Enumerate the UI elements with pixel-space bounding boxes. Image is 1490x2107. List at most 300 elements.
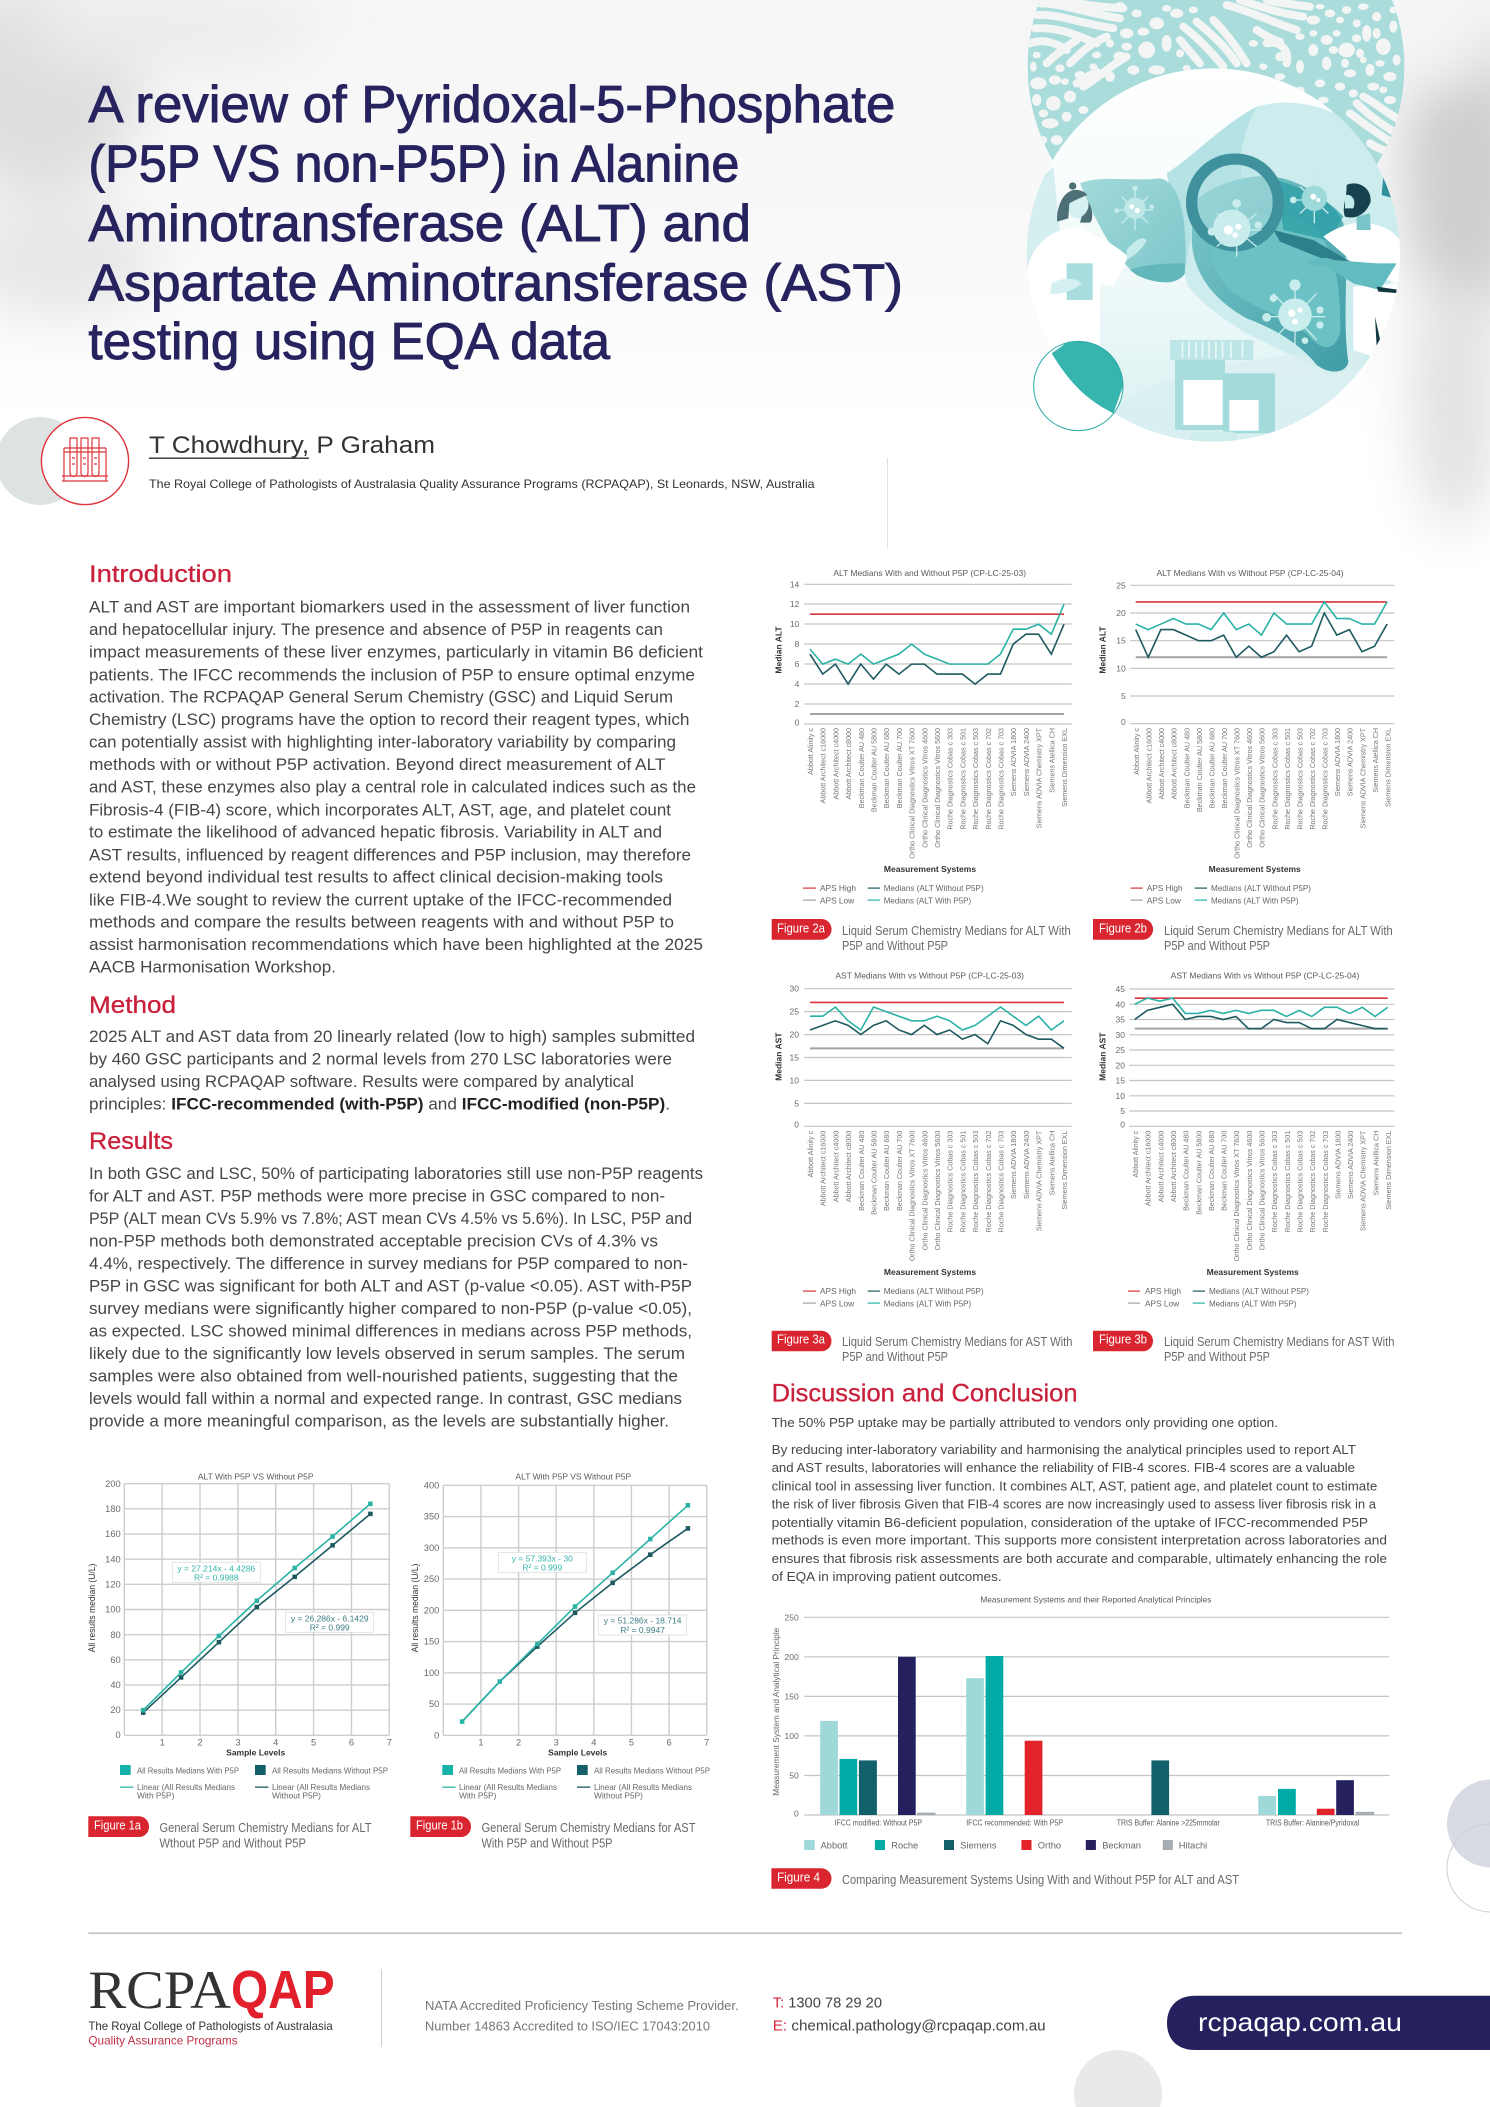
chart: figure 1a scatter: 2 <box>197 1738 203 1748</box>
chart: figure 3a line chart: Roche Diagnostics Cobas c 703 <box>998 1131 1006 1232</box>
chart: figure 3a line chart: APS High <box>820 1286 856 1296</box>
scientist man <box>1305 177 1403 367</box>
text block: method: 2025 ALT and AST data from 20 linearly related (low to high) samples submitted <box>89 1027 695 1046</box>
figure tag 3a <box>772 1331 832 1351</box>
text block: method: analysed using RCPAQAP software. Results were compared by analytical <box>89 1072 634 1091</box>
heading: method: Method <box>89 992 176 1019</box>
text block: results: survey medians were significantly higher compared to non-P5P (p-value <0.05), <box>89 1299 692 1318</box>
chart: figure 4 bar chart: IFCC recommended: With P5P <box>966 1818 1063 1827</box>
chart: figure 2b line chart: Siemens ADVIA 1800 <box>1334 728 1342 796</box>
text block: introduction: to estimate the likelihood of advanced hepatic fibrosis. Variability in ALT and <box>89 823 662 842</box>
chart: figure 2b line chart: Beckman Coulter AU 680 <box>1208 728 1216 808</box>
caption 3b: Liquid Serum Chemistry Medians for AST With <box>1164 1335 1395 1349</box>
panel: introduction <box>89 561 703 977</box>
chart: figure 3b line chart: 5 <box>1120 1106 1125 1116</box>
chart: figure 2b line chart: Beckman Coulter AU 700 <box>1221 728 1229 808</box>
chart: figure 1b scatter: R² = 0.999 <box>522 1562 563 1572</box>
chart: figure 1a scatter: All results median (U/L) <box>87 1564 97 1652</box>
figure tag 1a <box>88 1816 149 1837</box>
chart: figure 2a line chart: Abbott Alinity c <box>807 728 815 775</box>
chart: figure 1a scatter: ALT With P5P VS Without P5P <box>198 1471 314 1481</box>
chart: figure 1a scatter: 100 <box>105 1605 121 1615</box>
text block: introduction: patients. The IFCC recommends the inclusion of P5P to ensure optimal enzyme <box>89 665 695 684</box>
chart: figure 3a line chart: Siemens ADVIA 2400 <box>1023 1131 1031 1199</box>
chart: figure 1b scatter: y = 51.286x - 18.714 <box>604 1616 682 1626</box>
chart: figure 2a line chart: Siemens ADVIA Chemistry XPT <box>1036 727 1044 828</box>
chart: figure 1b scatter: 50 <box>429 1699 439 1709</box>
accreditation text: NATA Accredited Proficiency Testing Scheme Provider. <box>425 1999 739 2013</box>
magnifying glass <box>1192 159 1362 268</box>
caption 1a: Wthout P5P and Without P5P <box>160 1836 306 1850</box>
text block: introduction: AST results, influenced by reagent differences and P5P inclusion, may therefore <box>89 845 691 864</box>
inset circle <box>1033 340 1124 432</box>
chart: figure 1a scatter: 6 <box>349 1738 354 1748</box>
chart: figure 2a line chart: Beckman Coulter AU 480 <box>858 728 866 808</box>
chart: figure 4 bar chart: 200 <box>785 1652 799 1662</box>
logo: RCPAQAP: QAP <box>231 1960 335 2020</box>
chart: figure 2a line chart: 6 <box>795 659 800 669</box>
chart: figure 2b line chart: Siemens ADVIA Chemistry XPT <box>1359 727 1367 828</box>
chart: figure 2a line chart <box>772 568 1072 953</box>
chart: figure 2b line chart: Ortho Clinical Diagnostics Vitros 5600 <box>1259 728 1267 848</box>
text block: results: as expected. LSC showed minimal differences in medians across P5P methods, <box>89 1322 692 1340</box>
chart: figure 3a line chart: 25 <box>790 1007 799 1017</box>
chart: figure 1b scatter: 4 <box>591 1738 596 1748</box>
chart: figure 2a line chart: 10 <box>790 619 800 629</box>
chart: figure 1b scatter: 5 <box>629 1738 634 1748</box>
chart: figure 2b line chart: 10 <box>1116 663 1126 673</box>
bars: roche <box>840 1656 1296 1815</box>
text block: results: P5P (ALT mean CVs 5.9% vs 7.8%; AST mean CVs 4.5% vs 5.6%). In LSC, P5P and <box>89 1209 692 1228</box>
chart: figure 4 bar chart: 150 <box>785 1691 799 1701</box>
chart: figure 3b line chart: Abbott Architect c8000 <box>1170 1131 1178 1202</box>
chart: figure 1a scatter: Without P5P) <box>272 1791 321 1801</box>
chart: figure 2a line chart: Abbott Architect c16000 <box>820 728 828 803</box>
chart: figure 3a line chart: 5 <box>794 1098 799 1108</box>
chart: figure 3a line chart: Beckman Coulter AU 5800 <box>870 1131 878 1215</box>
caption 2b: P5P and Without P5P <box>1164 939 1270 953</box>
chart: figure 3b line chart: Medians (ALT With P5P) <box>1209 1298 1297 1308</box>
affiliation: The Royal College of Pathologists of Australasia Quality Assurance Programs (RCPAQAP), St Leonards, NSW, Australia <box>149 477 815 491</box>
chart: figure 1a scatter: All Results Medians Without P5P <box>272 1765 388 1775</box>
chart: figure 2a line chart: 12 <box>790 599 800 609</box>
chart: figure 1b scatter: 7 <box>704 1738 709 1748</box>
legend: Roche <box>891 1840 918 1850</box>
chart: figure 3b line chart: Ortho Clinical Diagnostics Vitros 5600 <box>1258 1131 1266 1250</box>
chart: figure 1b scatter: Linear (All Results Medians <box>459 1782 557 1792</box>
chart: figure 3a line chart: Roche Diagnostics Cobas c 303 <box>947 1131 955 1232</box>
caption 2b: Liquid Serum Chemistry Medians for ALT With <box>1164 924 1393 938</box>
contact details <box>773 1996 1046 2035</box>
chart: figure 2a line chart: Roche Diagnostics Cobas c 703 <box>998 728 1006 830</box>
chart: figure 2b line chart: Abbott Alinity c <box>1133 728 1141 775</box>
caption 3a: P5P and Without P5P <box>842 1350 948 1364</box>
caption 4: Comparing Measurement Systems Using With and Without P5P for ALT and AST <box>842 1873 1239 1887</box>
chart: figure 2b line chart: Roche Diagnostics Cobas c 703 <box>1322 728 1330 830</box>
chart: figure 3b line chart: Ortho Clinical Diagnostics Vitros XT 7600 <box>1233 1131 1241 1261</box>
text block: results: for ALT and AST. P5P methods were more precise in GSC compared to non- <box>89 1186 665 1206</box>
text block: results: non-P5P methods both demonstrated acceptable precision CVs of 4.3% vs <box>89 1232 658 1250</box>
text block: introduction: and AST, these enzymes also play a central role in calculated indices such as the <box>89 778 696 797</box>
chart: figure 2a line chart: Ortho Clinical Diagnostics Vitros XT 7600 <box>909 728 917 859</box>
text block: introduction: like FIB-4.We sought to review the current uptake of the IFCC-recommended <box>89 890 672 909</box>
chart: figure 1a scatter: 60 <box>110 1655 121 1665</box>
chart: figure 3a line chart <box>772 971 1073 1364</box>
chart: figure 3b line chart: Siemens ADVIA 2400 <box>1347 1131 1355 1199</box>
caption 3b: P5P and Without P5P <box>1164 1350 1270 1364</box>
chart: figure 3a line chart: Beckman Coulter AU 480 <box>858 1131 866 1211</box>
text block: introduction <box>89 598 703 977</box>
figure tag 3b <box>1093 1331 1153 1351</box>
chart: figure 3b line chart <box>1093 971 1395 1364</box>
chart: figure 2a line chart: 2 <box>795 699 800 709</box>
caption 3a: Liquid Serum Chemistry Medians for AST With <box>842 1335 1073 1349</box>
chart: figure 1a scatter: With P5P) <box>137 1791 175 1801</box>
chart: figure 4 bar chart: 100 <box>785 1731 799 1741</box>
title: testing using EQA data <box>88 313 610 371</box>
chart: figure 2b line chart: Medians (ALT Without P5P) <box>1211 883 1311 893</box>
chart: figure 1b scatter: 300 <box>424 1543 439 1553</box>
doctor woman <box>1027 182 1147 350</box>
chart: figure 1a scatter: R² = 0.9988 <box>194 1573 239 1583</box>
legend: Beckman <box>1102 1840 1141 1850</box>
figure tag 2a <box>772 919 832 940</box>
chart: figure 3b line chart: Siemens Atellica CH <box>1372 1131 1380 1195</box>
legend: Ortho <box>1038 1840 1061 1850</box>
chart: figure 4 bar chart: IFCC modified: Without P5P <box>835 1818 922 1827</box>
chart: figure 3b line chart: Abbott Architect c4000 <box>1157 1131 1165 1202</box>
text block: discussion: ensures that fibrosis risk assessments are both accurate and comparable, ultimately enhancing the role <box>772 1551 1387 1566</box>
chart: figure 1a scatter: All Results Medians With P5P <box>137 1765 239 1775</box>
text block: discussion: the risk of liver fibrosis Given that FIB-4 scores are now increasingly used to assess liver fibrosis risk in a <box>772 1497 1377 1512</box>
text block: discussion: The 50% P5P uptake may be partially attributed to vendors only providing one option. <box>772 1415 1278 1430</box>
contact details: E: chemical.pathology@rcpaqap.com.au <box>773 2019 1046 2035</box>
panel: method <box>89 992 695 1114</box>
chart: figure 1b scatter: Linear (All Results Medians <box>594 1782 692 1792</box>
chart: figure 3b line chart: Abbott Architect c16000 <box>1145 1131 1153 1206</box>
chart: figure 3a line chart: Ortho Clinical Diagnostics Vitros 5600 <box>934 1131 942 1250</box>
chart: figure 1a scatter: 7 <box>387 1738 392 1748</box>
chart: figure 2a line chart: 4 <box>795 679 800 689</box>
text block: method <box>89 1027 695 1114</box>
chart: figure 3a line chart: Measurement Systems <box>884 1267 976 1277</box>
chart: figure 3b line chart: Beckman Coulter AU 480 <box>1183 1131 1191 1211</box>
chart: figure 2a line chart: Medians (ALT With P5P) <box>884 896 971 906</box>
chart: figure 2a line chart: APS Low <box>820 896 855 906</box>
chart: figure 3a line chart: Abbott Architect c8000 <box>845 1131 853 1202</box>
chart: figure 3b line chart: Roche Diagnostics Cobas c 303 <box>1271 1131 1279 1232</box>
chart: figure 2b line chart: Siemens Atellica CH <box>1372 728 1380 793</box>
logo: RCPAQAP <box>88 1960 335 2048</box>
sample bottles <box>1170 340 1275 442</box>
chart: figure 1a scatter: 4 <box>273 1738 278 1748</box>
chart: figure 1a scatter: Sample Levels <box>226 1748 286 1758</box>
chart: figure 3b line chart: 40 <box>1116 999 1125 1009</box>
chart: figure 3b line chart: Ortho Clinical Diagnostics Vitros 4600 <box>1246 1131 1254 1250</box>
pattern: cell texture circle <box>1028 0 1404 165</box>
figure tag 4 <box>771 1868 832 1889</box>
chart: figure 3b line chart: 20 <box>1116 1060 1125 1070</box>
chart: figure 1a scatter: 80 <box>110 1630 121 1640</box>
caption 2a: P5P and Without P5P <box>842 939 948 953</box>
chart: figure 3b line chart: 0 <box>1120 1120 1125 1130</box>
chart: figure 2b line chart: Roche Diagnostics Cobas c 503 <box>1296 728 1304 830</box>
chart: figure 3a line chart: Siemens Dimension EXL <box>1061 1131 1069 1210</box>
chart: figure 2b line chart: Roche Diagnostics Cobas c 303 <box>1271 728 1279 830</box>
liver left lobe <box>1080 178 1186 282</box>
text block: method: by 460 GSC participants and 2 normal levels from 270 LSC laboratories were <box>89 1050 672 1068</box>
text block: results: In both GSC and LSC, 50% of participating laboratories still use non-P5P reagents <box>89 1164 703 1183</box>
chart: figure 2b line chart: Abbott Architect c4000 <box>1158 728 1166 799</box>
chart: figure 3b line chart: 45 <box>1116 984 1125 994</box>
chart: figure 1b scatter: 2 <box>516 1738 521 1748</box>
chart: figure 2a line chart: Abbott Architect c4000 <box>832 728 840 799</box>
chart: figure 2a line chart: Abbott Architect c8000 <box>845 728 853 799</box>
chart: figure 3a line chart: Roche Diagnostics Cobas c 503 <box>972 1131 980 1232</box>
text block: introduction: methods with or without P5P activation. Beyond direct measurement of ALT <box>89 755 666 774</box>
text block: introduction: Fibrosis-4 (FIB-4) score, which incorporates ALT, AST, age, and platelet count <box>89 800 671 819</box>
illustration disk <box>1023 67 1403 447</box>
chart: figure 1b scatter: 200 <box>424 1606 439 1616</box>
chart: figure 2a line chart: 0 <box>795 718 800 728</box>
chart: figure 3a line chart: Roche Diagnostics Cobas c 702 <box>985 1131 993 1232</box>
chart: figure 3b line chart: APS High <box>1145 1286 1181 1296</box>
title: A review of Pyridoxal-5-Phosphate <box>88 76 895 134</box>
chart: figure 3a line chart: Siemens ADVIA Chemistry XPT <box>1036 1130 1044 1231</box>
viruses <box>1114 186 1329 344</box>
chart: figure 3a line chart: Siemens ADVIA 1800 <box>1010 1131 1018 1199</box>
caption 1b: With P5P and Without P5P <box>482 1836 612 1850</box>
chart: figure 1a scatter: 40 <box>110 1680 121 1690</box>
heading: discussion and conclusion: Discussion and Conclusion <box>772 1380 1078 1408</box>
caption 3b <box>1164 1335 1395 1364</box>
bars: ortho <box>1025 1741 1334 1815</box>
text block: discussion: potentially vitamin B6-deficient population, consideration of the uptake of IFCC-recommended P5P <box>772 1515 1368 1530</box>
chart: figure 3b line chart: Roche Diagnostics Cobas c 703 <box>1322 1131 1330 1232</box>
panel: results <box>89 1128 703 1430</box>
chart: figure 3b line chart: Siemens Dimension EXL <box>1385 1131 1393 1210</box>
chart: figure 3a line chart: 0 <box>794 1120 799 1130</box>
text block: discussion: By reducing inter-laboratory variability and harmonising the analytical principles used to report ALT <box>772 1442 1356 1457</box>
legend <box>804 1840 1207 1850</box>
caption 2a: Liquid Serum Chemistry Medians for ALT With <box>842 924 1071 938</box>
chart: figure 2b line chart: Ortho Clinical Diagnostics Vitros XT 7600 <box>1234 728 1242 859</box>
chart: figure 3b line chart: Beckman Coulter AU 680 <box>1208 1131 1216 1211</box>
title <box>88 76 903 371</box>
chart: figure 3b line chart: Roche Diagnostics Cobas c 702 <box>1309 1131 1317 1232</box>
chart: figure 2a line chart: Siemens ADVIA 2400 <box>1023 728 1031 796</box>
chart: figure 1a scatter: 5 <box>311 1738 316 1748</box>
chart: figure 4 bar chart: TRIS Buffer: Alanine >225mmolar <box>1117 1818 1220 1827</box>
caption 2a <box>842 924 1071 953</box>
chart: figure 1b scatter: 1 <box>478 1738 483 1748</box>
chart: figure 3b line chart: Median AST <box>1098 1032 1108 1081</box>
chart: figure 1a scatter: 0 <box>116 1730 121 1740</box>
chart: figure 3a line chart: Median AST <box>774 1032 784 1081</box>
chart: figure 2b line chart: APS High <box>1147 883 1183 893</box>
text block: introduction: methods and compare the results between reagents with and without P5P to <box>89 913 674 932</box>
chart: figure 3b line chart: Siemens ADVIA 1800 <box>1334 1131 1342 1199</box>
chart: figure 2b line chart: ALT Medians With vs Without P5P (CP-LC-25-04) <box>1156 568 1344 578</box>
text block: discussion: methods is even more important. This supports more consistent interpretation across laboratories and <box>772 1533 1387 1548</box>
heading: introduction: Introduction <box>89 561 232 588</box>
chart: figure 2b line chart: Beckman Coulter AU 480 <box>1183 728 1191 808</box>
text block: results: P5P in GSC was significant for both ALT and AST (p-value <0.05). AST with-P5P <box>89 1276 692 1296</box>
text block: introduction: extend beyond individual test results to affect clinical decision-making tools <box>89 868 663 887</box>
liver right lobe <box>1192 176 1348 372</box>
text block: introduction: Chemistry (LSC) programs have the option to record their reagent types, which <box>89 710 690 729</box>
chart: figure 1b scatter: With P5P) <box>459 1791 497 1801</box>
chart: figure 4 bar chart: Measurement Systems and their Reported Analytical Principles <box>980 1595 1211 1605</box>
logo: RCPAQAP: Quality Assurance Programs <box>88 2034 238 2048</box>
caption 1b <box>482 1821 696 1850</box>
chart: figure 2b line chart <box>1093 568 1394 953</box>
chart: figure 2a line chart: Beckman Coulter AU 5800 <box>870 728 878 812</box>
chart: figure 2b line chart: Median ALT <box>1098 626 1108 674</box>
chart: figure 1b scatter: All results median (U/L) <box>410 1564 420 1652</box>
text block: introduction: and hepatocellular injury. The presence and absence of P5P in reagents can <box>89 620 663 639</box>
chart: figure 2a line chart: APS High <box>820 883 856 893</box>
chart: figure 1b scatter: Without P5P) <box>594 1791 643 1801</box>
chart: figure 2b line chart: 25 <box>1116 580 1126 590</box>
chart: figure 3a line chart: Siemens Atellica CH <box>1048 1131 1056 1195</box>
chart: figure 1a scatter: 120 <box>105 1580 121 1590</box>
chart: figure 3a line chart: 10 <box>790 1075 799 1085</box>
chart: figure 1b scatter: 400 <box>424 1480 439 1490</box>
chart: figure 1b scatter: 100 <box>424 1668 439 1678</box>
chart: figure 3a line chart: Medians (ALT With P5P) <box>884 1298 971 1308</box>
website pill: rcpaqap.com.au <box>1198 2007 1402 2037</box>
legend: Abbott <box>821 1840 848 1850</box>
chart: figure 1b scatter: Sample Levels <box>548 1748 608 1758</box>
chart: figure 3b line chart: AST Medians With vs Without P5P (CP-LC-25-04) <box>1171 971 1359 981</box>
figure tag 3b: Figure 3b <box>1099 1331 1147 1346</box>
chart: figure 2a line chart: Roche Diagnostics Cobas c 702 <box>985 728 993 830</box>
bars: abbott <box>820 1678 1276 1815</box>
text block: introduction: ALT and AST are important biomarkers used in the assessment of liver function <box>89 598 690 617</box>
bars: beckman <box>898 1657 1354 1815</box>
heading: results: Results <box>89 1128 173 1155</box>
panel: discussion and conclusion <box>772 1380 1387 1584</box>
chart: figure 3a line chart: Beckman Coulter AU 680 <box>883 1131 891 1211</box>
chart: figure 3b line chart: Abbott Alinity c <box>1132 1130 1140 1178</box>
chart: figure 3b line chart: 15 <box>1116 1076 1125 1086</box>
chart: figure 2b line chart: Siemens ADVIA 2400 <box>1347 728 1355 796</box>
caption 1a: General Serum Chemistry Medians for ALT <box>160 1821 372 1835</box>
chart: figure 2a line chart: Roche Diagnostics Cobas c 503 <box>972 728 980 830</box>
chart: figure 2a line chart: ALT Medians With and Without P5P (CP-LC-25-03) <box>833 568 1026 578</box>
accreditation text <box>425 1999 739 2034</box>
figure tag 2b <box>1093 919 1153 940</box>
chart: figure 2a line chart: Beckman Coulter AU 700 <box>896 728 904 808</box>
legend: Siemens <box>960 1840 997 1850</box>
figure tag 4: Figure 4 <box>777 1870 820 1885</box>
chart: figure 4 bar chart <box>771 1595 1389 1889</box>
chart: figure 2a line chart: 14 <box>790 579 800 589</box>
text block: results: provide a more meaningful comparison, as the levels are substantially higher. <box>89 1412 669 1430</box>
accreditation text: Number 14863 Accredited to ISO/IEC 17043:2010 <box>425 2020 710 2034</box>
chart: figure 2b line chart: 5 <box>1121 691 1126 701</box>
chart: figure 1b scatter: 0 <box>434 1730 439 1740</box>
chart: figure 1a scatter: Linear (All Results Medians <box>137 1782 235 1792</box>
chart: figure 2b line chart: Medians (ALT With P5P) <box>1211 896 1299 906</box>
chart: figure 1a scatter: 3 <box>235 1738 240 1748</box>
chart: figure 1a scatter: 1 <box>160 1738 165 1748</box>
chart: figure 1a scatter: 160 <box>105 1529 121 1539</box>
chart: figure 3b line chart: Siemens ADVIA Chemistry XPT <box>1360 1130 1368 1231</box>
text block: method: principles: IFCC-recommended (with-P5P) and IFCC-modified (non-P5P). <box>89 1094 670 1114</box>
chart: figure 1a scatter: 140 <box>105 1554 121 1564</box>
figure tag 3a: Figure 3a <box>777 1331 826 1346</box>
icon: test tubes badge <box>0 417 129 505</box>
chart: figure 4 bar chart: Measurement System and Analytical Principle <box>771 1627 781 1796</box>
figure tag 2a: Figure 2a <box>777 921 826 936</box>
chart: figure 2a line chart: Beckman Coulter AU 680 <box>883 728 891 808</box>
chart: figure 3b line chart: Roche Diagnostics Cobas c 503 <box>1296 1131 1304 1232</box>
chart: figure 3a line chart: APS Low <box>820 1298 855 1308</box>
bars: siemens <box>859 1760 1169 1815</box>
chart: figure 1b scatter <box>410 1471 710 1850</box>
caption 1a <box>160 1821 372 1850</box>
chart: figure 3a line chart: 30 <box>790 984 799 994</box>
chart: figure 2b line chart: 20 <box>1116 608 1126 618</box>
chart: figure 2a line chart: Roche Diagnostics Cobas c 501 <box>959 728 967 830</box>
website pill <box>1167 1996 1490 2050</box>
text block: discussion <box>772 1415 1387 1584</box>
chart: figure 1b scatter: 6 <box>667 1738 672 1748</box>
chart: figure 2a line chart: Siemens Dimension EXL <box>1061 728 1069 807</box>
chart: figure 3b line chart: 30 <box>1116 1030 1125 1040</box>
chart: figure 1b scatter: 350 <box>424 1512 439 1522</box>
chart: figure 3a line chart: Ortho Clinical Diagnostics Vitros 4600 <box>921 1131 929 1250</box>
chart: figure 1b scatter: 150 <box>424 1637 439 1647</box>
chart: figure 2a line chart: Siemens Atellica CH <box>1048 728 1056 793</box>
chart: figure 1b scatter: 250 <box>424 1574 439 1584</box>
chart: figure 1a scatter: R² = 0.999 <box>310 1623 350 1633</box>
chart: figure 1b scatter: R² = 0.9947 <box>620 1625 665 1635</box>
chart: figure 2b line chart: Roche Diagnostics Cobas c 501 <box>1284 728 1292 830</box>
logo: RCPAQAP: The Royal College of Pathologists of Australasia <box>88 2019 333 2033</box>
figure tag 1a: Figure 1a <box>94 1817 142 1832</box>
figure tag 1b <box>410 1816 471 1837</box>
chart: figure 3a line chart: 15 <box>790 1052 799 1062</box>
chart: figure 1a scatter: Linear (All Results Medians <box>272 1782 370 1792</box>
chart: figure 1b scatter: All Results Medians With P5P <box>459 1765 561 1775</box>
text block: results <box>89 1164 703 1430</box>
chart: figure 2a line chart: 8 <box>795 639 800 649</box>
text block: introduction: assist harmonisation recommendations which have been highlighted at the 2025 <box>89 935 703 954</box>
illustration: liver examination <box>1026 0 1404 442</box>
chart: figure 1b scatter: y = 57.393x - 30 <box>512 1553 573 1563</box>
chart: figure 3b line chart: 25 <box>1116 1045 1125 1055</box>
chart: figure 3a line chart: Abbott Architect c4000 <box>832 1131 840 1202</box>
text block: results: 4.4%, respectively. The difference in survey medians for P5P compared to non- <box>89 1254 688 1273</box>
chart: figure 1a scatter <box>87 1471 392 1850</box>
text block: introduction: activation. The RCPAQAP General Serum Chemistry (GSC) and Liquid Serum <box>89 688 673 707</box>
chart: figure 2a line chart: Roche Diagnostics Cobas c 303 <box>947 728 955 830</box>
chart: figure 2b line chart: Beckman Coulter AU 5800 <box>1196 728 1204 812</box>
chart: figure 3a line chart: AST Medians With vs Without P5P (CP-LC-25-03) <box>835 971 1024 981</box>
chart: figure 1a scatter: 20 <box>110 1705 121 1715</box>
text block: discussion: clinical tool in assessing liver function. It combines ALT, AST, patient age, and platelet count to estimate <box>772 1478 1377 1493</box>
chart: figure 3b line chart: Roche Diagnostics Cobas c 501 <box>1284 1131 1292 1232</box>
chart: figure 3a line chart: Abbott Alinity c <box>807 1130 815 1178</box>
chart: figure 4 bar chart: 250 <box>785 1612 799 1622</box>
title: Aspartate Aminotransferase (AST) <box>88 254 903 312</box>
title: Aminotransferase (ALT) and <box>88 195 751 253</box>
chart: figure 3a line chart: Beckman Coulter AU 700 <box>896 1131 904 1211</box>
authors: T Chowdhury, P Graham <box>149 432 435 459</box>
